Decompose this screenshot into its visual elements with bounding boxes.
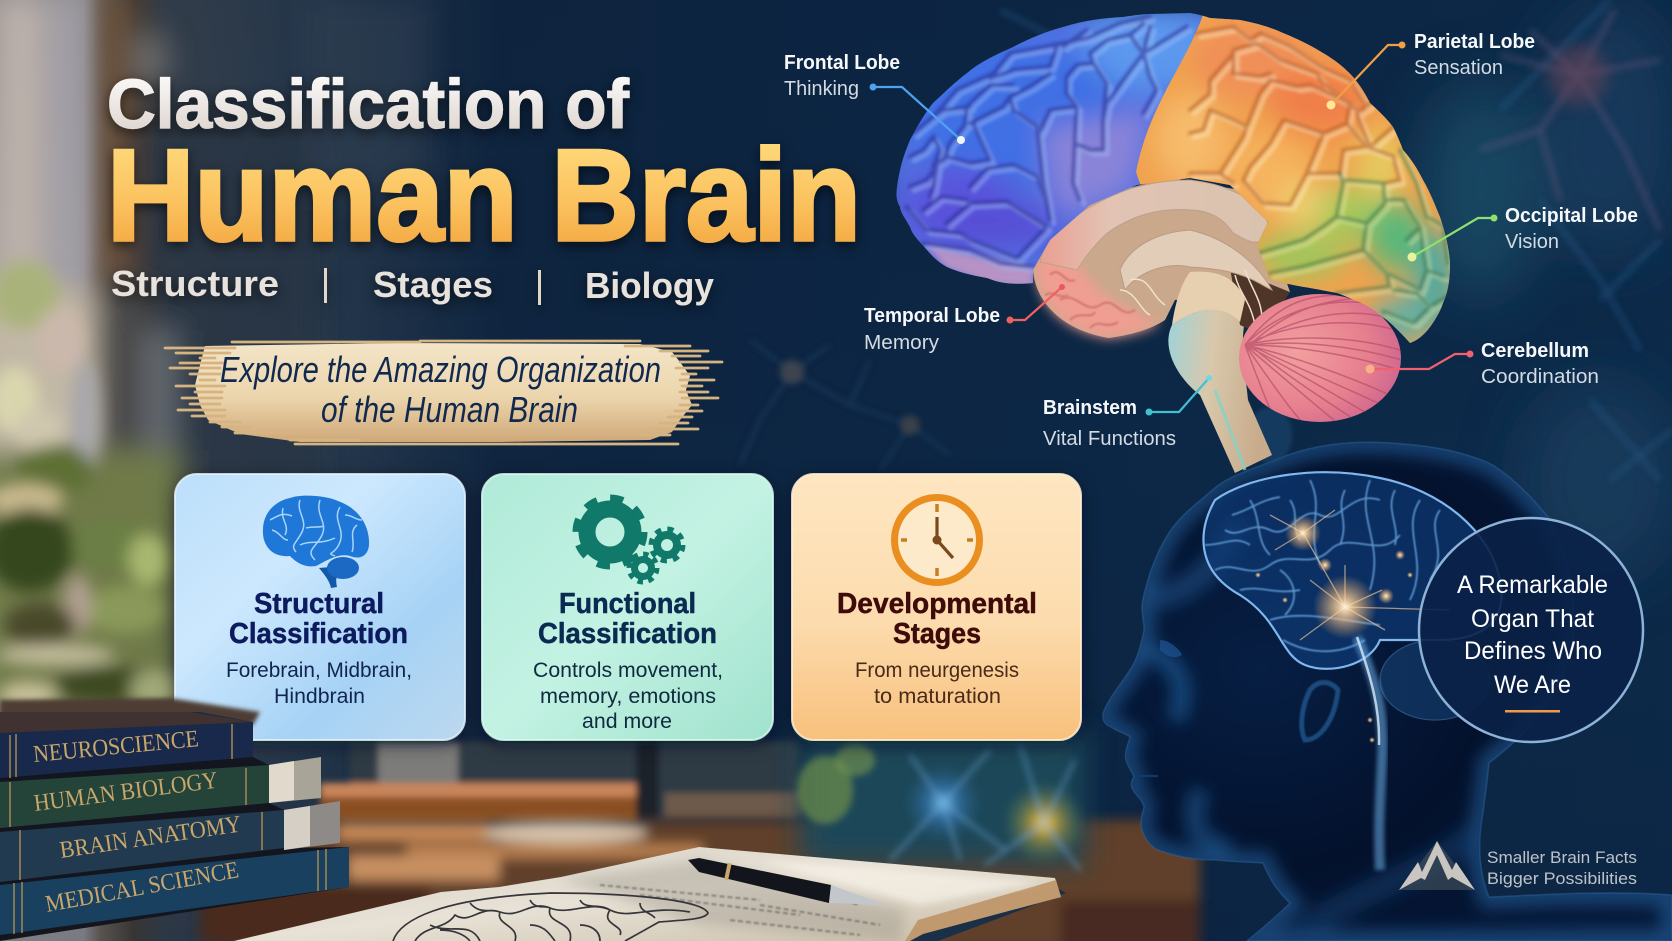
label: temporal lobe	[864, 284, 1065, 354]
label: temporal lobe: Memory	[864, 332, 939, 354]
book: neuroscience	[0, 712, 253, 778]
callout circle: We Are	[1494, 671, 1571, 699]
brainstem	[1168, 309, 1272, 473]
card heading: Classification	[229, 618, 408, 650]
card description: and more	[582, 710, 672, 733]
card heading	[837, 588, 1037, 650]
card: structural classification	[175, 474, 465, 740]
book: brain anatomy	[0, 801, 340, 882]
slogan: Smaller Brain Facts	[1487, 848, 1637, 867]
book: medical science	[0, 847, 349, 935]
label: temporal lobe: Temporal Lobe	[864, 305, 1000, 327]
card description: Forebrain, Midbrain,	[226, 659, 412, 682]
neuron field bottom	[800, 730, 1085, 865]
tagline text: Explore the Amazing Organization	[220, 349, 661, 390]
icon: gears	[577, 499, 683, 582]
brush stroke	[165, 341, 722, 444]
label: frontal lobe	[784, 52, 965, 144]
card description	[533, 659, 723, 733]
open notebook with pen	[234, 847, 1066, 941]
slogan: Bigger Possibilities	[1487, 869, 1637, 888]
icon: mountain	[1399, 841, 1475, 890]
card description: to maturation	[874, 685, 1001, 708]
label: occipital lobe: Occipital Lobe	[1505, 205, 1638, 227]
desk back	[320, 740, 803, 823]
tagline brush banner	[165, 341, 722, 444]
card description	[226, 659, 412, 708]
label: cerebellum: Coordination	[1481, 366, 1599, 388]
title line 2: Human Brain	[107, 122, 861, 268]
label: brainstem: Vital Functions	[1043, 428, 1176, 450]
corpus callosum arch	[1040, 180, 1269, 270]
label: occipital lobe: Vision	[1505, 231, 1559, 253]
tagline text: of the Human Brain	[321, 389, 578, 430]
card heading: Structural	[254, 588, 384, 620]
inner brain	[1203, 472, 1502, 870]
pen	[688, 858, 886, 905]
label: cerebellum: Cerebellum	[1481, 340, 1589, 362]
figure: glowing head with brain	[1103, 442, 1672, 941]
label: parietal lobe: Parietal Lobe	[1414, 31, 1535, 53]
card heading: Classification	[538, 618, 717, 650]
book: brain anatomy: BRAIN ANATOMY	[58, 811, 243, 864]
subtitle row: Biology	[585, 265, 714, 306]
book stack	[0, 698, 349, 941]
label: brainstem: Brainstem	[1043, 397, 1137, 419]
icon: brain	[263, 496, 369, 588]
label: occipital lobe	[1408, 205, 1638, 262]
parietal and occipital colour field	[1136, 16, 1450, 343]
table top	[200, 820, 1200, 941]
atmospheric glow	[1420, 0, 1672, 580]
label: brainstem	[1043, 375, 1212, 450]
card description	[855, 659, 1019, 708]
book: medical science: MEDICAL SCIENCE	[43, 857, 241, 918]
card: functional classification	[482, 474, 773, 740]
lower frontal pink strip	[925, 245, 1035, 290]
card description: Controls movement,	[533, 659, 723, 682]
pages	[234, 847, 1061, 941]
book: human biology: HUMAN BIOLOGY	[32, 768, 219, 817]
subtitle row: Structure	[111, 263, 279, 304]
cortical folds	[907, 17, 1452, 327]
limbic interior	[1033, 178, 1290, 338]
label: frontal lobe: Thinking	[784, 78, 859, 100]
slogan	[1487, 848, 1637, 888]
callout circle	[1419, 518, 1643, 742]
card: developmental stages	[792, 474, 1081, 740]
icon: clock	[894, 498, 980, 582]
page shadow	[560, 860, 905, 941]
notebook cover	[905, 885, 1066, 941]
head rim shading	[1103, 442, 1672, 941]
sketch of brain	[393, 893, 708, 941]
label: parietal lobe	[1326, 31, 1535, 110]
label: cerebellum	[1366, 340, 1599, 388]
window and back wall blur	[0, 0, 430, 720]
label: frontal lobe: Frontal Lobe	[784, 52, 900, 74]
title	[107, 65, 861, 268]
footer logo and slogan	[1399, 841, 1637, 890]
card heading: Stages	[893, 618, 981, 650]
tagline text	[220, 349, 661, 430]
book: human biology	[0, 757, 321, 828]
handwritten lines	[600, 885, 880, 935]
card heading: Functional	[559, 588, 696, 620]
label: parietal lobe: Sensation	[1414, 57, 1503, 79]
card heading	[538, 588, 717, 650]
card heading: Developmental	[837, 588, 1037, 620]
card heading	[229, 588, 408, 650]
callout circle: A Remarkable	[1457, 571, 1608, 599]
background neurons	[740, 0, 1672, 480]
subtitle row	[111, 263, 714, 306]
face details	[1160, 640, 1182, 657]
title line 1: Classification of	[107, 65, 630, 143]
cerebrum lobes	[896, 13, 1450, 343]
main coloured brain	[880, 0, 1470, 473]
cerebellum	[1239, 294, 1402, 425]
book: neuroscience: NEUROSCIENCE	[32, 726, 200, 768]
card description: From neurgenesis	[855, 659, 1019, 682]
foliage blur	[0, 261, 180, 710]
card description: memory, emotions	[540, 685, 716, 708]
dark underside	[1248, 407, 1292, 463]
callout circle: Defines Who	[1464, 637, 1602, 665]
callout circle: Organ That	[1471, 605, 1594, 633]
subtitle row: Stages	[373, 264, 493, 305]
card description: Hindbrain	[274, 685, 365, 708]
